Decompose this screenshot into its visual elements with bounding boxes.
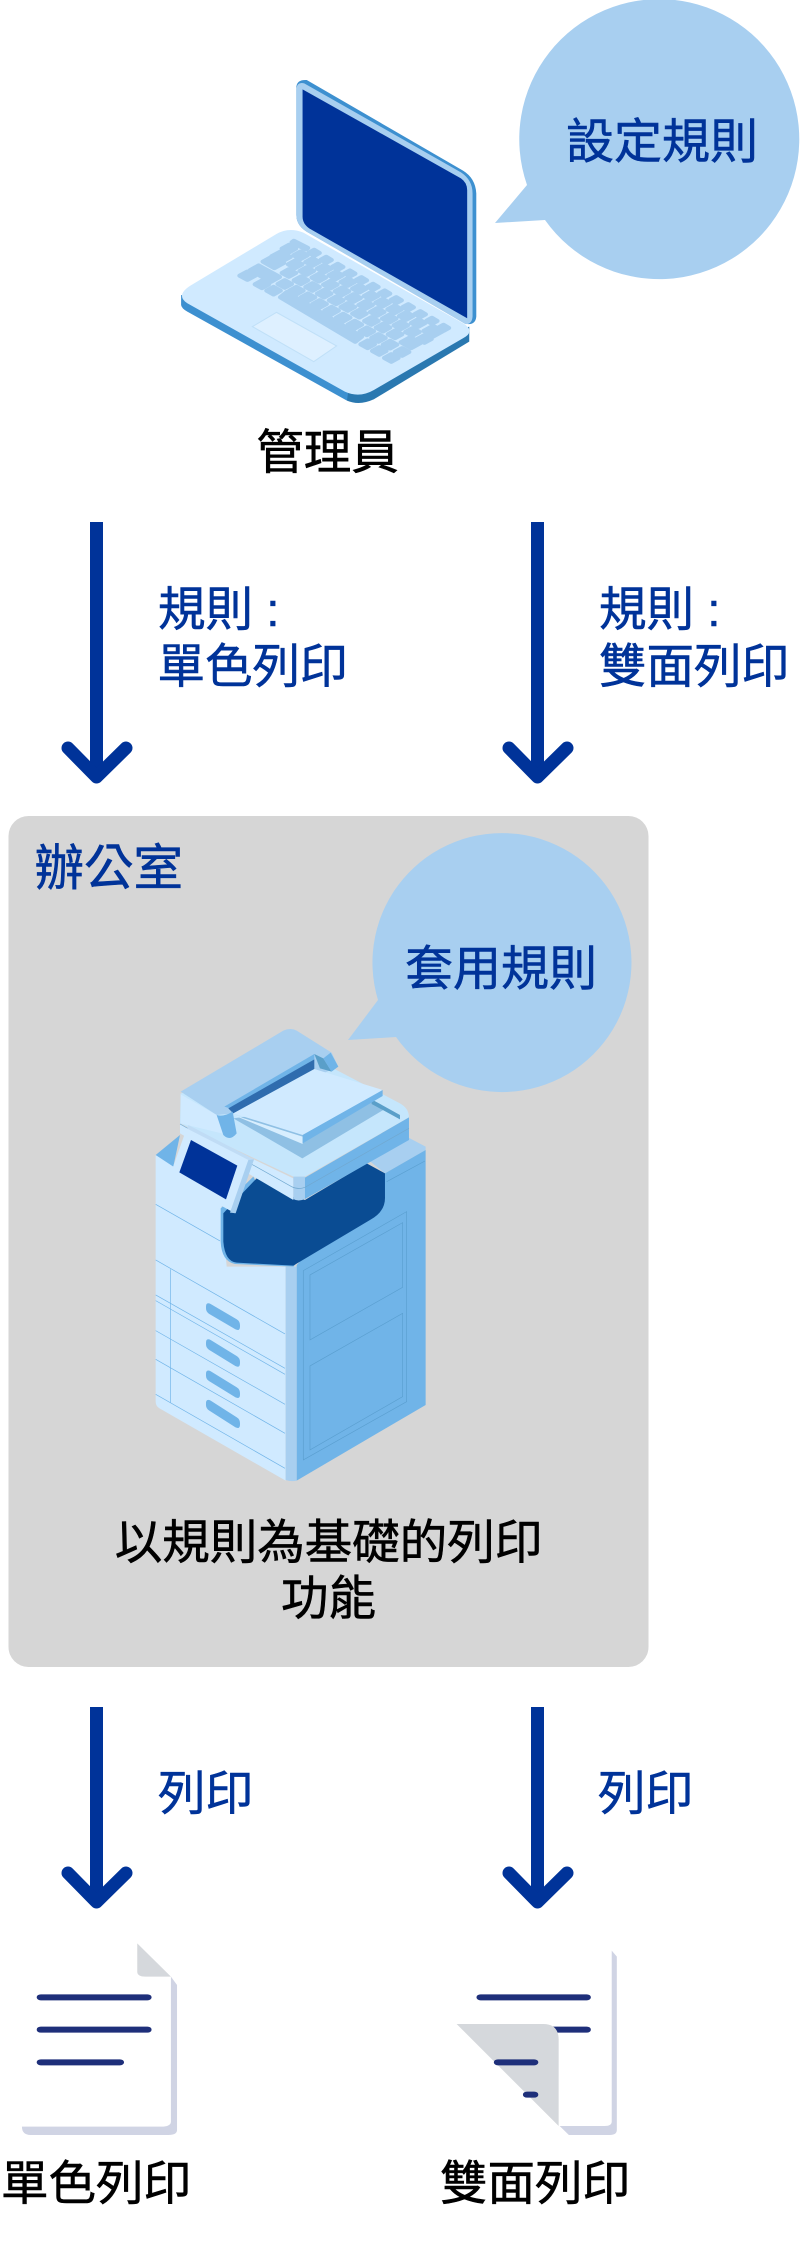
label: mono print: 單色列印 — [1, 2158, 191, 2211]
label: rule-based print feature: 以規則為基礎的列印 — [115, 1517, 542, 1570]
icon: multifunction printer — [156, 1029, 426, 1481]
icon: double-side document — [457, 1951, 617, 2135]
label: rule duplex print: 雙面列印 — [599, 641, 789, 694]
label: administrator: 管理員 — [256, 427, 399, 480]
icon: single-side document — [22, 1943, 177, 2135]
label: rule mono print: 單色列印 — [158, 641, 348, 694]
label: print left: 列印 — [158, 1768, 253, 1821]
label: rule duplex print — [599, 584, 789, 694]
callout: set rules — [495, 0, 799, 279]
callout: apply rules — [348, 833, 631, 1092]
label: rule-based print feature — [115, 1517, 542, 1626]
panel heading: office: 辦公室 — [34, 841, 183, 896]
arrow: print left — [68, 1707, 126, 1902]
label: rule duplex print: 規則 : — [599, 584, 720, 637]
callout: apply rules: 套用規則 — [405, 943, 597, 996]
label: print right: 列印 — [598, 1768, 693, 1821]
icon: laptop — [181, 80, 476, 403]
label: rule mono print: 規則 : — [158, 584, 279, 637]
label: duplex print: 雙面列印 — [440, 2158, 630, 2211]
label: rule-based print feature: 功能 — [281, 1573, 376, 1626]
arrow: rule to office right — [509, 522, 567, 777]
arrow: rule to office left — [68, 522, 126, 777]
panel: office — [8, 816, 648, 1667]
callout: set rules: 設定規則 — [566, 116, 758, 169]
arrow: print right — [509, 1707, 567, 1902]
label: rule mono print — [158, 584, 348, 694]
